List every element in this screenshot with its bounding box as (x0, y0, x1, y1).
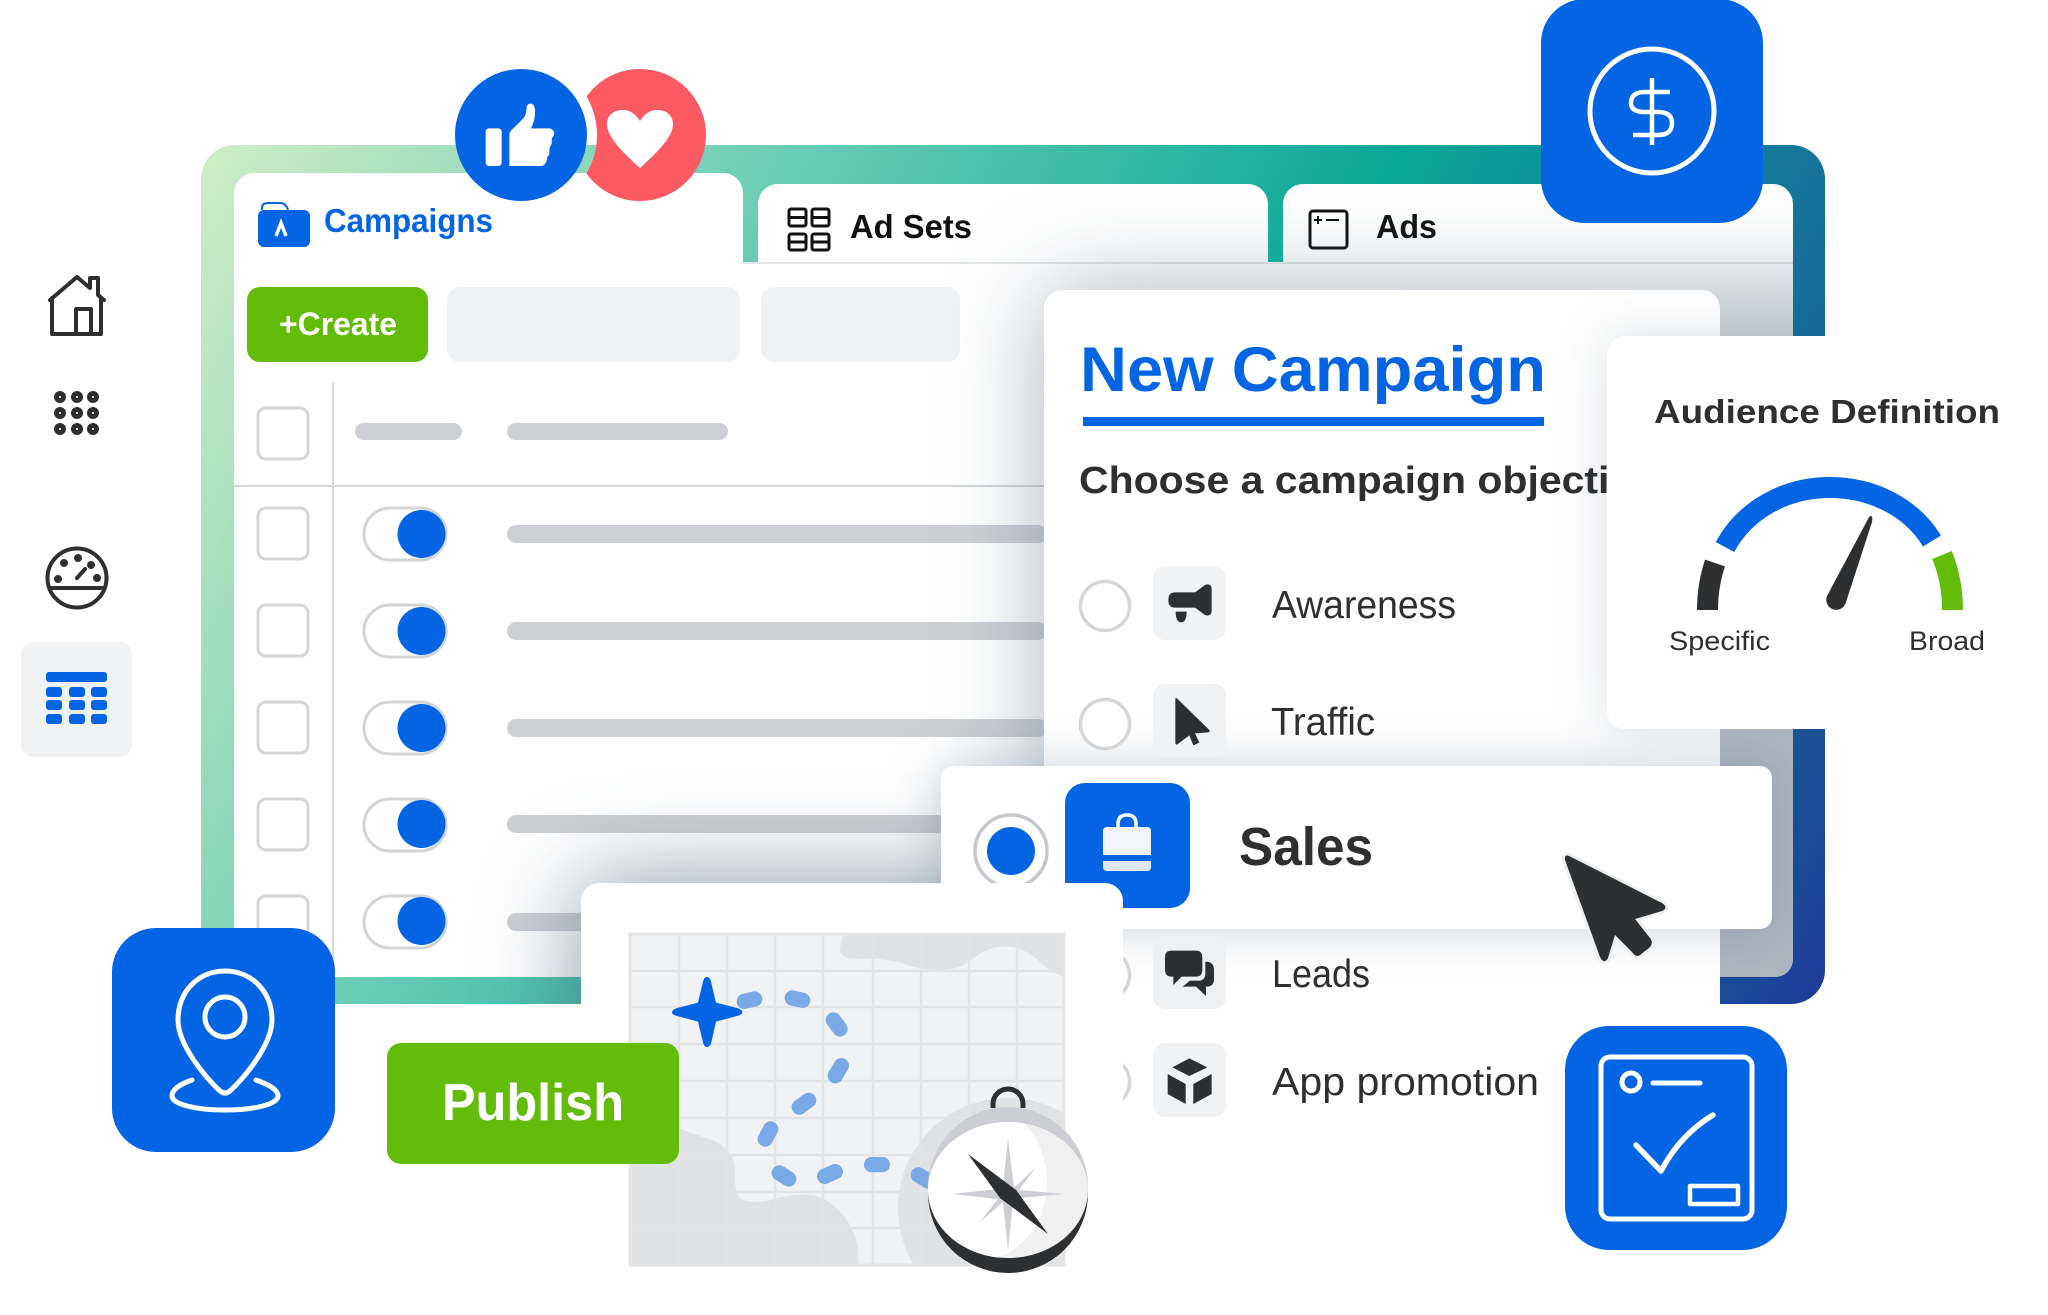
placeholder button (761, 287, 960, 362)
sidebar navigation (21, 277, 132, 757)
icon: heart reaction (574, 69, 706, 201)
option: App promotion (1080, 1043, 1539, 1117)
button: create: +Create (279, 306, 397, 342)
button: publish: Publish (442, 1074, 624, 1132)
tab label: Ad Sets: Ad Sets (850, 208, 972, 245)
tab label: Campaigns: Campaigns (324, 202, 493, 239)
icon: blue star marker (672, 977, 742, 1047)
tab: Ad Sets (758, 184, 1268, 263)
icon: compass (913, 1089, 1088, 1273)
icon: dollar tile (1541, 0, 1763, 223)
icon: dashboard gauge (48, 548, 106, 608)
label: Sales: Sales (1239, 817, 1373, 877)
option: Leads: Leads (1272, 953, 1370, 996)
table row 5 (258, 896, 807, 948)
button: publish (387, 1043, 679, 1164)
dashed route (744, 998, 928, 1181)
option: Leads (1080, 936, 1370, 1009)
icon: chat bubbles (1165, 951, 1214, 996)
table header row (258, 408, 728, 459)
panel: new campaign (1044, 290, 1720, 1117)
table row 4 (258, 799, 1047, 851)
option: Traffic: Traffic (1271, 701, 1375, 744)
heading: New Campaign: New Campaign (1080, 335, 1546, 405)
panel: map (581, 883, 1123, 1315)
icon: megaphone (1168, 584, 1212, 622)
icon: ads window (1310, 211, 1347, 248)
tab: Ads (1283, 184, 1793, 263)
icon: cube (1168, 1058, 1212, 1104)
icon: large cursor (1565, 856, 1666, 961)
subheading: Choose a campaign objective (1079, 460, 1655, 502)
icon: campaign folder (258, 203, 310, 247)
table row 1 (258, 508, 1047, 560)
option: App promotion: App promotion (1272, 1061, 1539, 1104)
active item: table view (21, 642, 132, 757)
icon: shopping bag tile (1065, 783, 1190, 908)
panel: audience definition (1607, 336, 2040, 729)
gauge needle (1826, 516, 1872, 610)
icon: checklist tile (1565, 1026, 1787, 1250)
map (628, 932, 1066, 1266)
heading underline (1083, 417, 1544, 426)
option: Awareness: Awareness (1272, 584, 1456, 627)
gradient window frame (201, 145, 1825, 1004)
gauge (1708, 488, 1952, 610)
icon: small cursor (1175, 698, 1210, 745)
icon: ad sets grid (789, 209, 829, 250)
campaigns table panel (234, 263, 1793, 977)
option: Awareness (1080, 566, 1456, 640)
icon: apps grid (56, 394, 96, 432)
tab: Campaigns (234, 173, 743, 263)
selected radio (975, 815, 1047, 887)
icon: location tile (112, 928, 335, 1152)
tab label: Ads: Ads (1376, 208, 1437, 245)
button: create (247, 287, 428, 362)
icon: home (50, 277, 104, 334)
placeholder button (447, 287, 740, 362)
panel: sales option highlighted (941, 766, 1772, 929)
gauge label: Broad: Broad (1909, 626, 1985, 656)
table row 3 (258, 702, 1047, 754)
gauge label: Specific: Specific (1669, 626, 1770, 656)
icon: thumbs up reaction (455, 69, 587, 201)
table row 2 (258, 605, 1047, 657)
heading: Audience Definition: Audience Definition (1654, 393, 2000, 430)
option: Traffic (1080, 684, 1375, 757)
